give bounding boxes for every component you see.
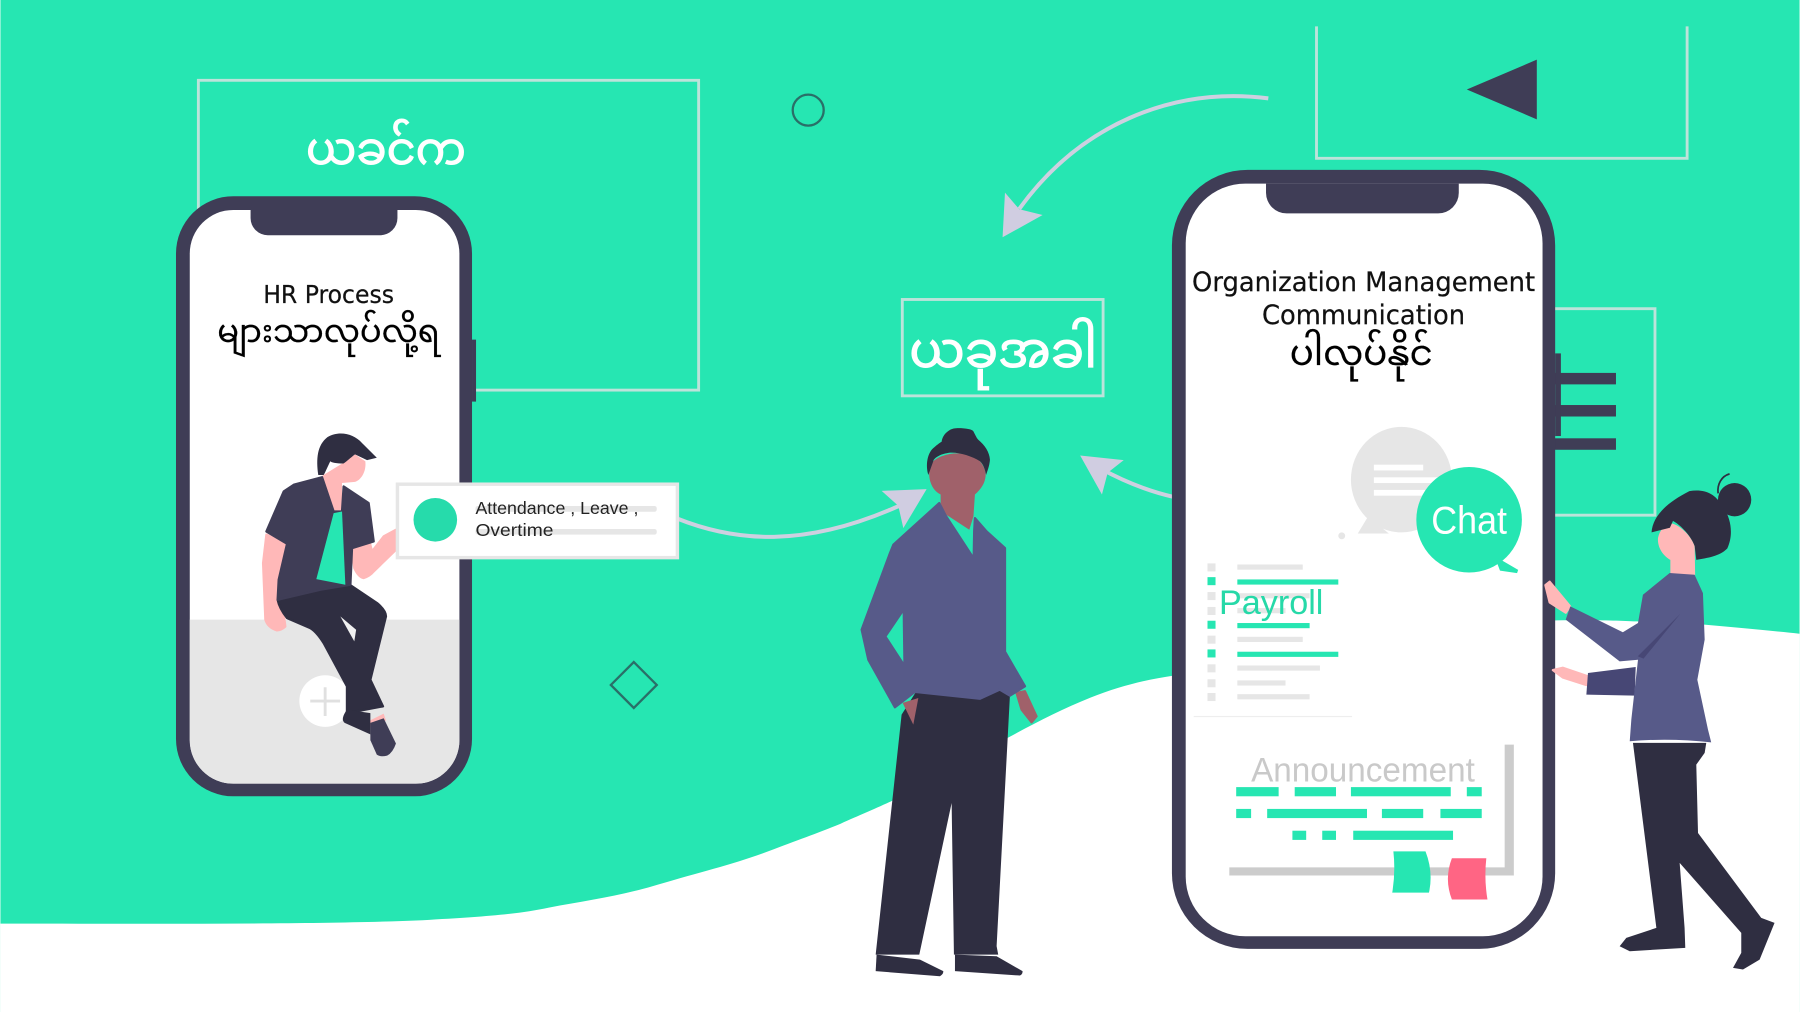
decorative diamond (611, 662, 657, 708)
box: now label: ယခုအခါ (909, 317, 1097, 390)
announcement panel (1229, 745, 1514, 900)
icon: green chat bubble: Chat (1431, 500, 1507, 543)
arrow: card to man (677, 489, 927, 537)
plus button (299, 675, 351, 727)
outline frame: right (1549, 309, 1655, 515)
phone text: organization: Organization Management (1192, 268, 1535, 298)
callout card: attendance (397, 484, 677, 558)
box: now label (902, 299, 1103, 396)
arrow: top curve (1003, 96, 1268, 237)
illustration: woman (1545, 474, 1775, 970)
decorative circle (793, 95, 824, 126)
panel: right phone (1172, 170, 1561, 949)
callout card: attendance: Attendance , Leave , (475, 498, 638, 518)
phone text: HR Process: HR Process (263, 280, 394, 309)
phone text: Burmese line: ပါလုပ်နိုင် (1290, 328, 1433, 382)
callout card: attendance: Overtime (475, 520, 554, 540)
payroll list (1194, 563, 1352, 717)
outline frame: top right (1317, 26, 1687, 158)
arrow: right phone to man (1080, 456, 1173, 497)
icon: grey chat bubble (1338, 427, 1454, 539)
payroll list: Payroll (1219, 584, 1323, 622)
panel: left phone (176, 196, 476, 796)
back triangle icon (1467, 60, 1537, 119)
outline frame: left (198, 80, 699, 390)
illustration: sitting man (263, 434, 396, 756)
heading: before: ယခင်က (306, 117, 466, 174)
icon: green chat bubble (1416, 467, 1522, 573)
phone text: communication: Communication (1262, 301, 1465, 331)
illustration: standing man (862, 428, 1037, 976)
white wave (0, 620, 1800, 1012)
menu bars icon (1549, 373, 1616, 450)
phone text: Burmese line: များသာလုပ်လို့ရ (217, 308, 442, 357)
announcement panel: Announcement (1251, 751, 1475, 789)
